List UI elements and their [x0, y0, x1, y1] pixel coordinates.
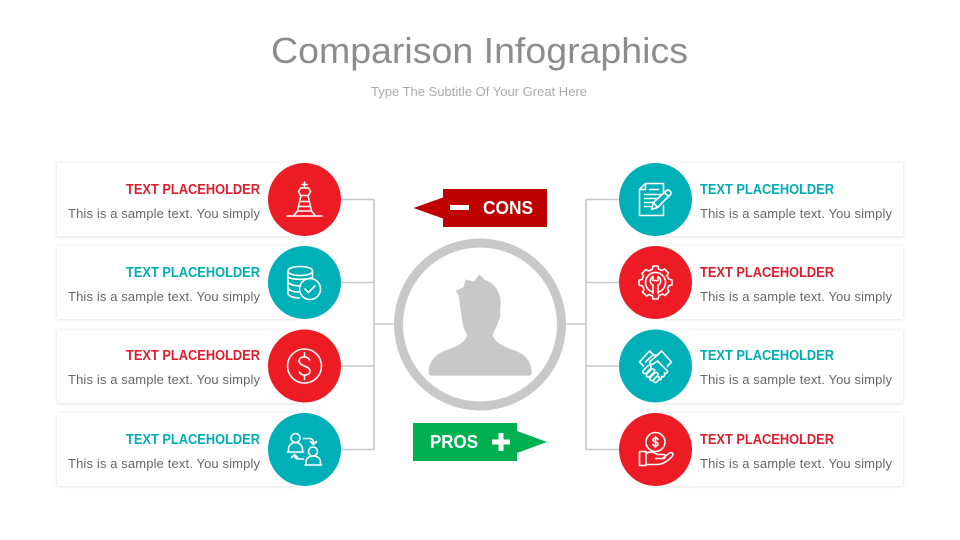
body text: This is a sample text. You simply — [700, 456, 892, 471]
icon: handshake — [619, 330, 692, 402]
panel: left item 1 — [57, 163, 297, 236]
connector lines: left — [341, 200, 394, 450]
heading: TEXT PLACEHOLDER — [126, 182, 260, 198]
label: PROS — [430, 432, 478, 452]
central person ring — [398, 243, 562, 406]
icon: gear with wrench — [619, 246, 692, 319]
icon: document and pen — [619, 163, 692, 236]
icon: hand holding coin — [619, 413, 692, 486]
body text: This is a sample text. You simply — [700, 372, 892, 387]
label: CONS — [483, 198, 533, 218]
icon: database check — [268, 246, 341, 319]
icon: plus — [492, 433, 510, 451]
panel: left item 4 — [57, 413, 297, 486]
heading: TEXT PLACEHOLDER — [700, 265, 834, 281]
heading: TEXT PLACEHOLDER — [126, 348, 260, 364]
body text: This is a sample text. You simply — [68, 289, 260, 304]
connector lines: right — [566, 200, 619, 450]
subtitle: Type The Subtitle Of Your Great Here — [371, 84, 587, 99]
panel: right item 3 — [663, 330, 903, 403]
body text: This is a sample text. You simply — [700, 206, 892, 221]
body text: This is a sample text. You simply — [68, 456, 260, 471]
panel: right item 4 — [663, 413, 903, 486]
panel: left item 2 — [57, 246, 297, 319]
title: Comparison Infographics — [271, 30, 688, 71]
panel: right item 2 — [663, 246, 903, 319]
body text: This is a sample text. You simply — [68, 372, 260, 387]
panel: right item 1 — [663, 163, 903, 236]
heading: TEXT PLACEHOLDER — [700, 432, 834, 448]
icon: dollar coin — [268, 330, 341, 402]
heading: TEXT PLACEHOLDER — [700, 182, 834, 198]
icon: minus — [450, 205, 469, 210]
heading: TEXT PLACEHOLDER — [700, 348, 834, 364]
heading: TEXT PLACEHOLDER — [126, 265, 260, 281]
icon: people exchange — [268, 413, 341, 486]
icon: person silhouette — [429, 274, 532, 376]
callout: cons — [414, 189, 547, 227]
icon: chess king — [268, 163, 341, 236]
body text: This is a sample text. You simply — [68, 206, 260, 221]
body text: This is a sample text. You simply — [700, 289, 892, 304]
callout: pros — [413, 423, 547, 461]
panel: left item 3 — [57, 330, 297, 403]
heading: TEXT PLACEHOLDER — [126, 432, 260, 448]
